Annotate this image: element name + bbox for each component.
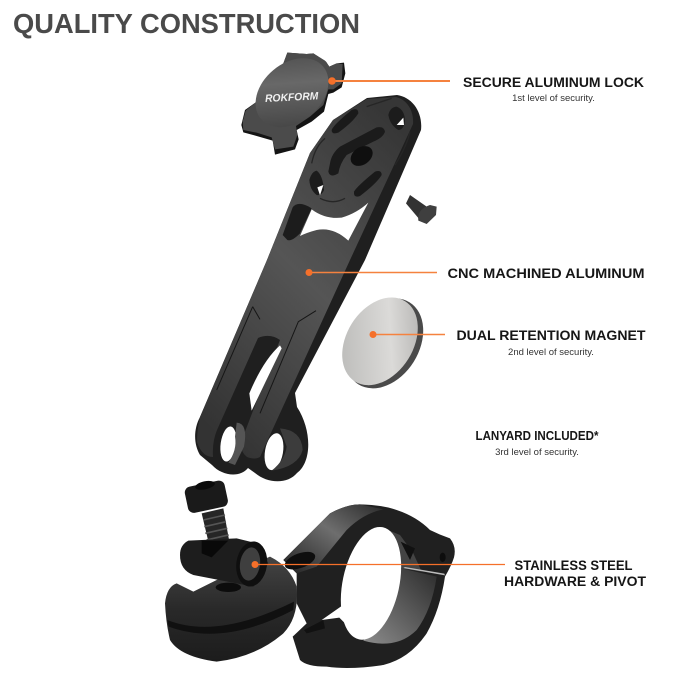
callout: stainless steel hardware and pivot: STAINLESS STEEL [514,558,632,573]
callout: lanyard included: 3rd level of security. [495,447,579,458]
icon: screw [406,195,437,224]
clamp body [283,504,455,668]
callout: stainless steel hardware and pivot [252,558,647,589]
callout: secure aluminum lock [328,75,644,104]
title: QUALITY CONSTRUCTION [13,8,360,39]
callout: secure aluminum lock: SECURE ALUMINUM LOCK [463,75,644,90]
clamp bore [331,521,411,645]
callout: secure aluminum lock: 1st level of security. [512,93,595,104]
base pod [165,557,297,662]
callout: lanyard included [476,429,599,458]
puck logo: ROKFORM [265,90,320,105]
clamp inner band [363,568,437,644]
callout: CNC machined aluminum: CNC MACHINED ALUMINUM [448,266,644,281]
callout: dual retention magnet: 2nd level of security. [508,347,594,358]
plate lower slots [217,307,316,472]
callout: dual retention magnet [370,328,646,358]
icon: magnet disc [327,284,439,403]
pivot barrel [180,538,268,587]
icon: handlebar clamp with pivot [165,479,455,668]
icon: aluminum lock puck [241,44,345,155]
icon: CNC machined aluminum plate [195,95,421,481]
pivot bolt [202,508,229,548]
callout: lanyard included: LANYARD INCLUDED* [476,429,599,443]
callout: stainless steel hardware and pivot: HARDWARE & PIVOT [504,574,647,589]
callout: CNC machined aluminum [306,266,644,281]
callout: dual retention magnet: DUAL RETENTION MAGNET [456,328,646,343]
plate mount recess [283,98,410,241]
